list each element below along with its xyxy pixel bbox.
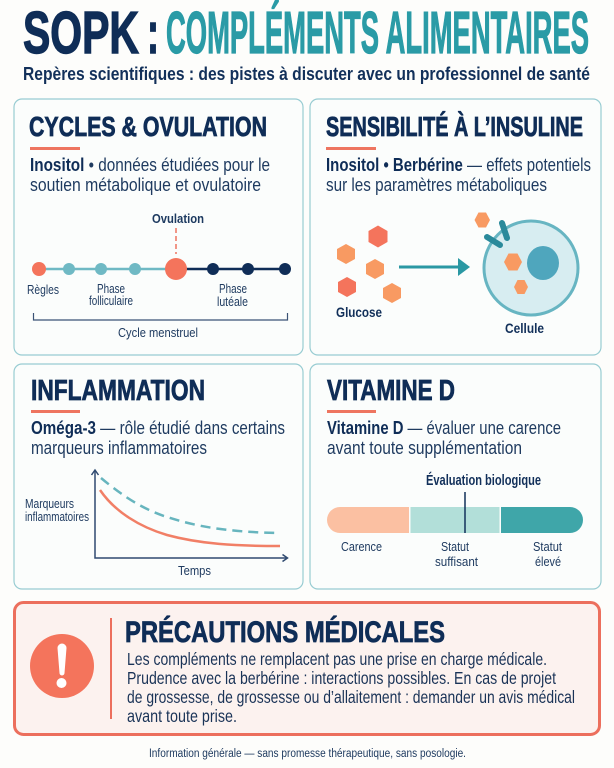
- icon: glucose molecules: [336, 226, 401, 320]
- text: oméga-3: marqueurs inflammatoires: [31, 438, 207, 458]
- line chart: inflammatoires: [25, 510, 89, 524]
- scale bar: Statut: [533, 539, 562, 554]
- text: précautions: [127, 649, 575, 726]
- footer note: Information générale — sans promesse thérapeutique, sans posologie.: [149, 748, 466, 760]
- icon: warning: [30, 634, 94, 698]
- text: oméga-3: Oméga-3 — rôle étudié dans certains: [31, 418, 285, 438]
- panel: inflammation: [14, 364, 303, 589]
- chart: timeline: lutéale: [217, 294, 248, 309]
- heading: cycles: CYCLES & OVULATION: [29, 111, 267, 142]
- text: inositol et berbérine: [326, 155, 591, 195]
- text: vitamine D: Vitamine D — évaluer une carence: [327, 418, 561, 438]
- text: précautions: avant toute prise.: [127, 706, 237, 726]
- text: inositol: soutien métabolique et ovulatoire: [30, 175, 261, 195]
- scale bar: Statut: [441, 539, 469, 554]
- chart: timeline: folliculaire: [89, 293, 133, 308]
- text: vitamine D: avant toute supplémentation: [327, 438, 522, 458]
- title: SOPK: [23, 0, 139, 66]
- text: vitamine D: [327, 418, 561, 458]
- arrow: [399, 258, 470, 276]
- chart: timeline: Cycle menstruel: [118, 325, 198, 340]
- heading: vitamine D: VITAMINE D: [327, 375, 455, 407]
- scale bar: suffisant: [435, 554, 478, 569]
- heading: précautions: PRÉCAUTIONS MÉDICALES: [125, 615, 445, 649]
- scale bar: élevé: [535, 554, 561, 569]
- icon: cell: [474, 212, 578, 336]
- line chart: Marqueurs: [25, 497, 74, 511]
- title: :: [147, 0, 159, 66]
- panel: vitamine D: [310, 364, 601, 589]
- panel: cycles et ovulation: [14, 99, 303, 355]
- text: inositol: [30, 155, 270, 195]
- line chart: [25, 470, 288, 578]
- scale bar: Évaluation biologique: [426, 472, 541, 489]
- icon: cell: Cellule: [505, 320, 544, 336]
- text: inositol et berbérine: sur les paramètres métaboliques: [326, 175, 547, 195]
- chart: timeline: Phase: [219, 281, 247, 296]
- chart: timeline: Règles: [27, 282, 59, 297]
- text: oméga-3: [31, 418, 285, 458]
- chart: timeline: Phase: [97, 281, 125, 296]
- scale bar: Carence: [341, 539, 382, 554]
- chart: timeline: Ovulation: [152, 211, 204, 226]
- panel: précautions médicales: [14, 602, 600, 734]
- text: inositol: Inositol • données étudiées pour le: [30, 155, 270, 175]
- scale bar: [327, 472, 583, 569]
- line chart: Temps: [178, 563, 211, 578]
- chart: timeline: [27, 211, 291, 340]
- heading: inflammation: INFLAMMATION: [31, 375, 205, 407]
- icon: glucose molecules: Glucose: [336, 304, 382, 320]
- text: inositol et berbérine: Inositol • Berbérine — effets potentiels: [326, 155, 591, 175]
- panel: sensibilité à l'insuline: [310, 99, 601, 355]
